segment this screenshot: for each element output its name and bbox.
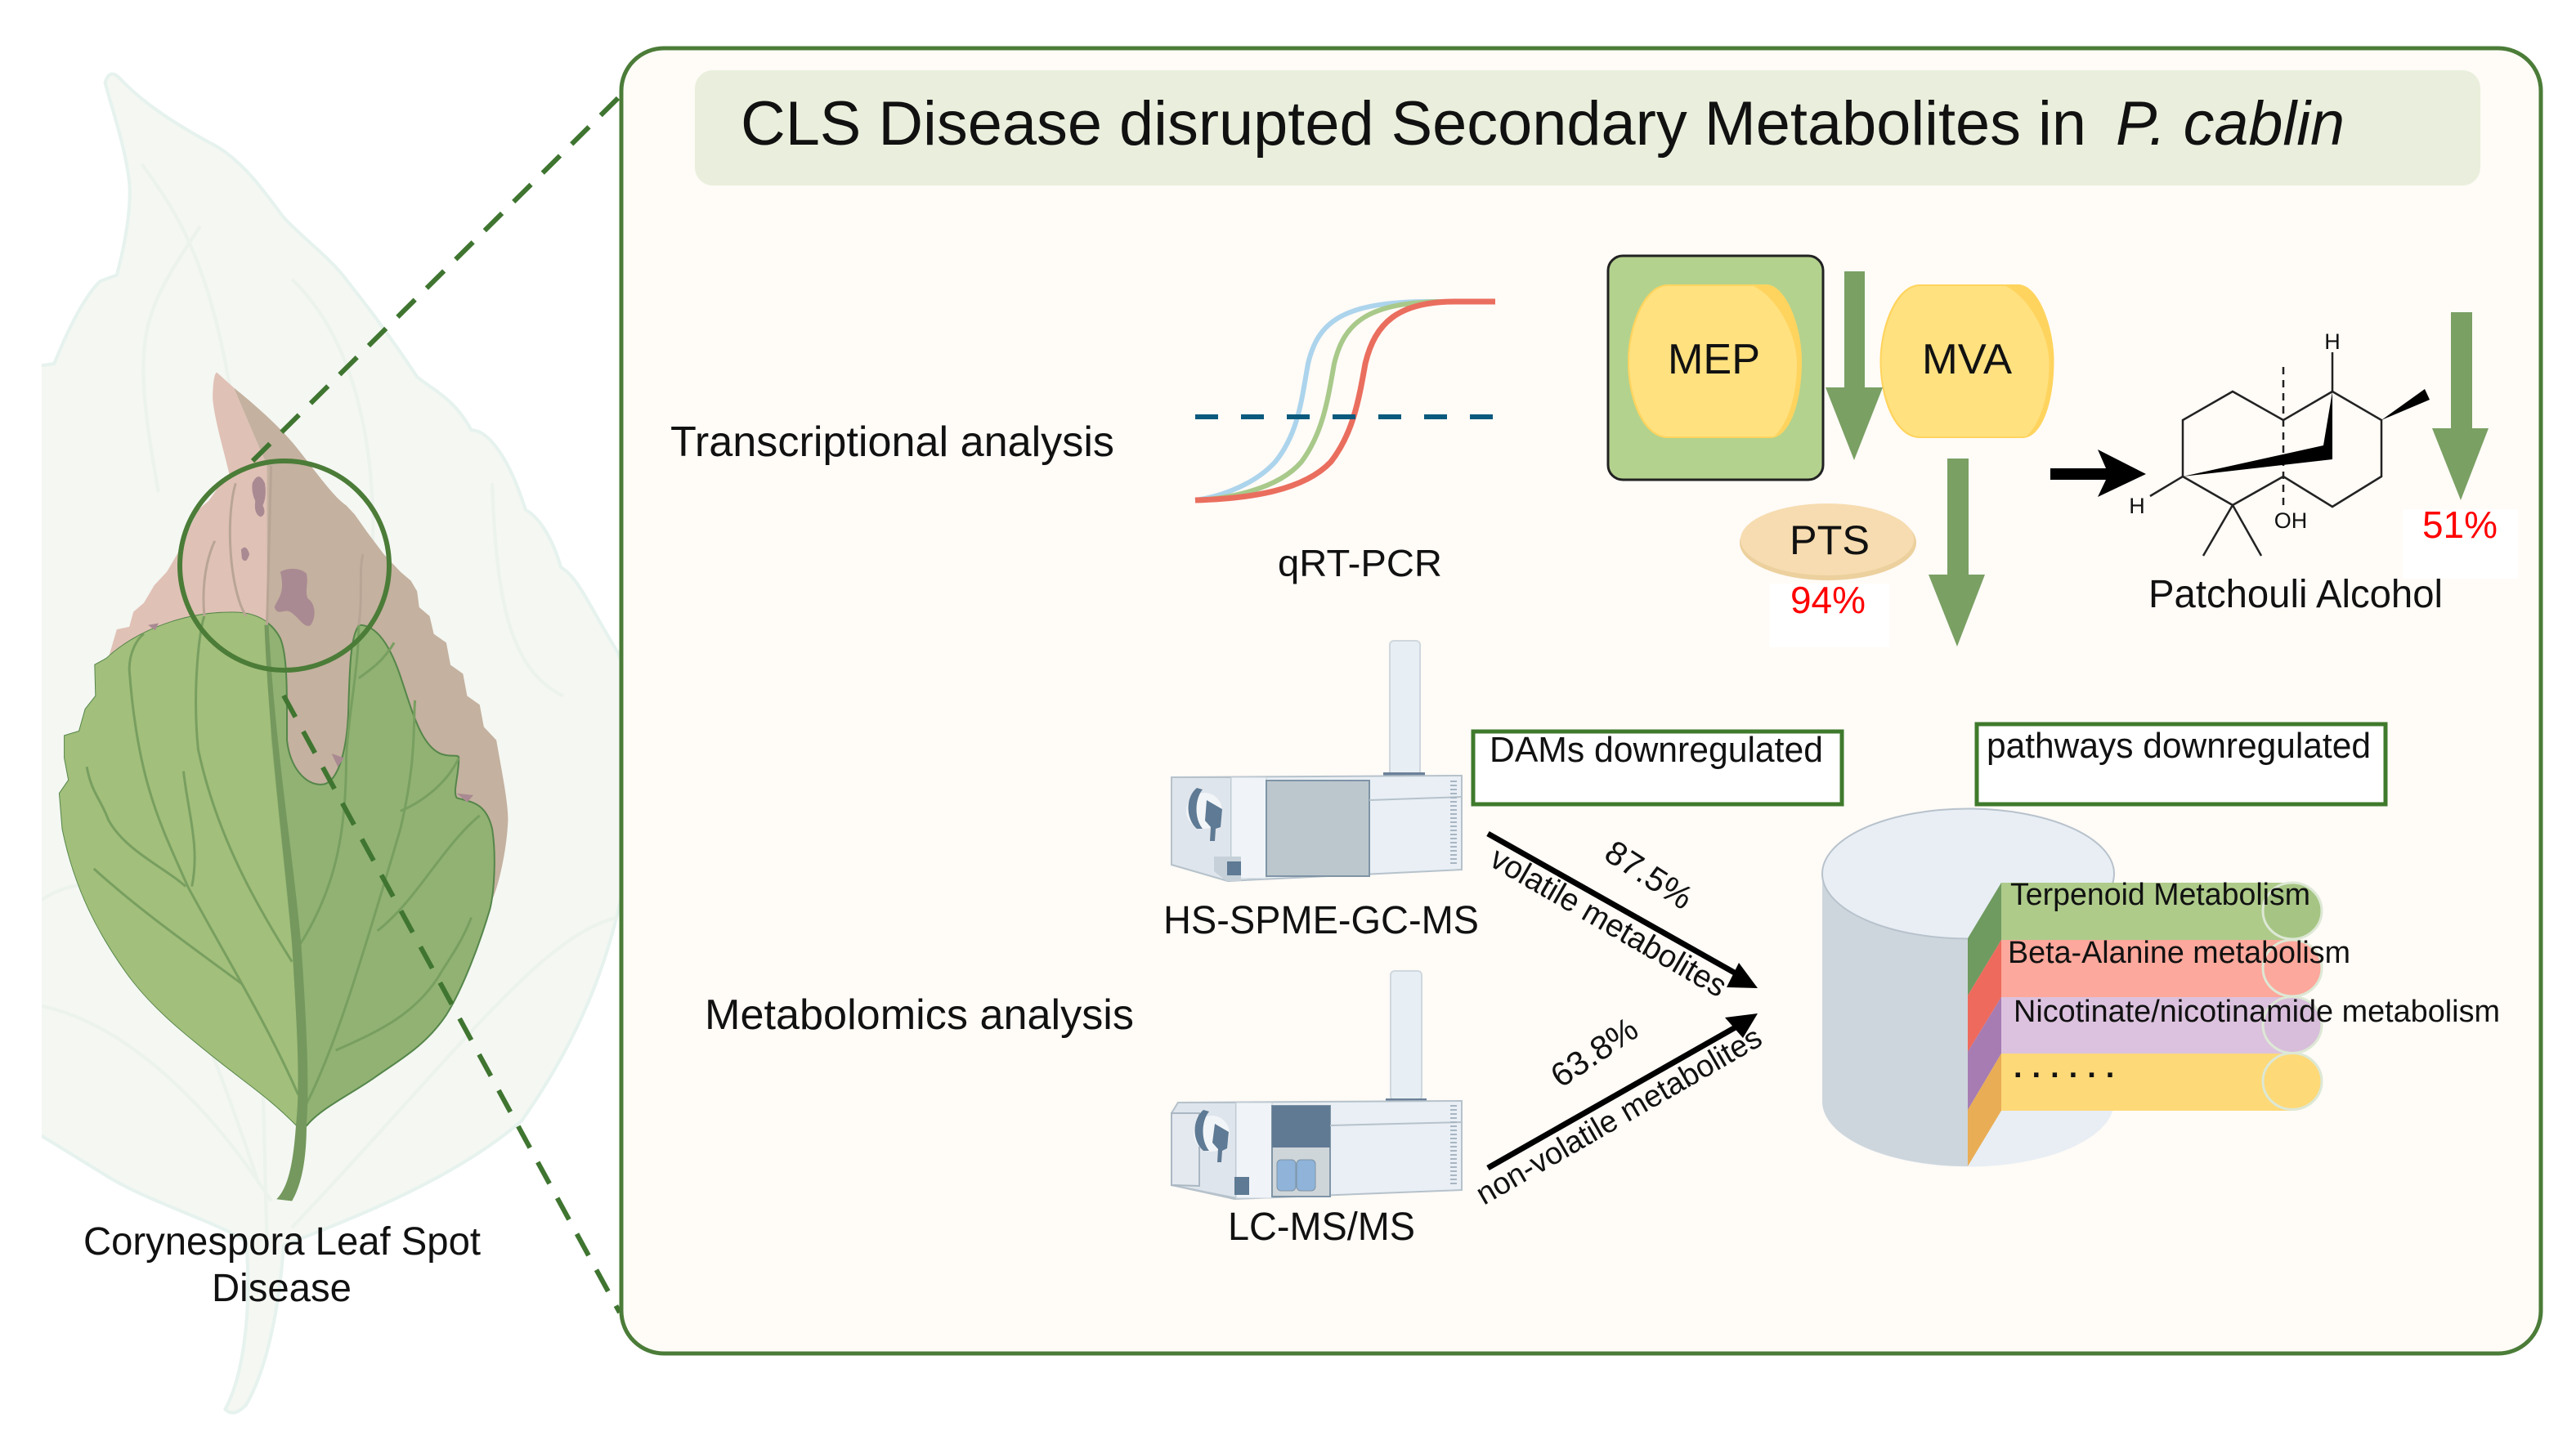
label: beta-alanine metabolism: Beta-Alanine metabolism bbox=[2008, 936, 2350, 970]
arrow: volatile metabolites bbox=[1488, 834, 1758, 988]
diseased leaf bbox=[60, 373, 508, 1201]
label: dots: ...... bbox=[2014, 1050, 2124, 1085]
faded background leaf bbox=[25, 74, 634, 1413]
51% label bbox=[2403, 503, 2518, 579]
instrument: HS-SPME-GC-MS bbox=[1172, 641, 1462, 881]
qRT-PCR chart bbox=[1195, 302, 1495, 500]
cylinder with pathway slices bbox=[1822, 809, 2500, 1167]
patchouli alcohol molecule: H bbox=[2324, 329, 2341, 354]
patchouli alcohol molecule: OH bbox=[2274, 508, 2307, 533]
title bar bbox=[695, 70, 2480, 186]
leaf label: Corynespora Leaf Spot bbox=[83, 1220, 481, 1264]
arrow: down MEP/MVA bbox=[1826, 271, 1883, 460]
patchouli alcohol molecule bbox=[2129, 329, 2430, 556]
pathways box: pathways downregulated bbox=[1987, 726, 2371, 766]
instrument: LC-MS/MS bbox=[1172, 971, 1462, 1199]
heading: transcriptional analysis: Transcriptional analysis bbox=[670, 418, 1114, 466]
MVA pill: MVA bbox=[1922, 336, 2012, 383]
PTS ellipse bbox=[1740, 503, 1916, 580]
label: HS-SPME-GC-MS: HS-SPME-GC-MS bbox=[1163, 899, 1479, 942]
heading: metabolomics analysis: Metabolomics analysis bbox=[705, 991, 1134, 1039]
title bar: CLS Disease disrupted Secondary Metabolites in bbox=[741, 89, 2086, 159]
label: volatile metabolites: volatile metabolites bbox=[1485, 841, 1732, 1004]
title bar: P. cablin bbox=[2116, 89, 2345, 159]
label: non-volatile metabolites: non-volatile metabolites bbox=[1470, 1020, 1767, 1212]
label: 63.8%: 63.8% bbox=[1543, 1009, 1645, 1094]
zoom callout dashed lines bbox=[253, 98, 620, 1313]
patchouli alcohol molecule: H bbox=[2129, 494, 2145, 518]
pathways box bbox=[1977, 724, 2386, 804]
diseased veins bbox=[204, 466, 363, 625]
leaf midrib and stem bbox=[264, 625, 307, 1201]
slice: beta-alanine bbox=[1968, 940, 2322, 1052]
label: nicotinate metabolism: Nicotinate/nicotinamide metabolism bbox=[2014, 995, 2500, 1029]
leaf healthy left half bbox=[60, 613, 298, 1125]
DAMs box: DAMs downregulated bbox=[1490, 730, 1823, 770]
leaf diseased tissue, pink side bbox=[106, 373, 267, 669]
DAMs box bbox=[1473, 730, 1842, 804]
slice: nicotinate bbox=[1968, 997, 2322, 1110]
label: terpenoid metabolism: Terpenoid Metabolism bbox=[2010, 878, 2310, 912]
MEP box bbox=[1608, 256, 1823, 480]
leaf diseased tissue, tan side bbox=[234, 387, 508, 900]
slice: terpenoid bbox=[1968, 883, 2322, 995]
main panel bbox=[621, 48, 2541, 1353]
leaf label bbox=[83, 1220, 481, 1310]
PTS ellipse: PTS bbox=[1790, 517, 1870, 563]
arrow: non-volatile metabolites bbox=[1488, 1013, 1758, 1168]
cylinder top bbox=[1822, 809, 2114, 938]
arrow: to patchouli alcohol bbox=[2050, 450, 2146, 497]
cylinder left shade bbox=[1822, 874, 1968, 1166]
MVA pill bbox=[1880, 284, 2054, 438]
zoom circle bbox=[180, 461, 389, 670]
qRT-PCR label: qRT-PCR bbox=[1278, 542, 1442, 584]
label: 87.5%: 87.5% bbox=[1598, 833, 1700, 917]
94% label bbox=[1769, 579, 1889, 647]
94% label: 94% bbox=[1790, 579, 1866, 621]
disease spots bbox=[148, 476, 473, 803]
cylinder body bbox=[1822, 874, 2114, 1167]
arrow: down patchouli alcohol bbox=[2432, 312, 2489, 500]
leaf label: Disease bbox=[212, 1267, 352, 1310]
MEP box: MEP bbox=[1668, 336, 1760, 383]
leaf healthy tissue bbox=[60, 613, 495, 1125]
label: LC-MS/MS: LC-MS/MS bbox=[1228, 1206, 1415, 1249]
patchouli alcohol label: Patchouli Alcohol bbox=[2148, 573, 2443, 616]
arrow: down PTS bbox=[1929, 459, 1985, 646]
slice: others bbox=[1968, 1053, 2322, 1166]
51% label: 51% bbox=[2422, 503, 2498, 546]
leaf veins bbox=[87, 616, 480, 1103]
